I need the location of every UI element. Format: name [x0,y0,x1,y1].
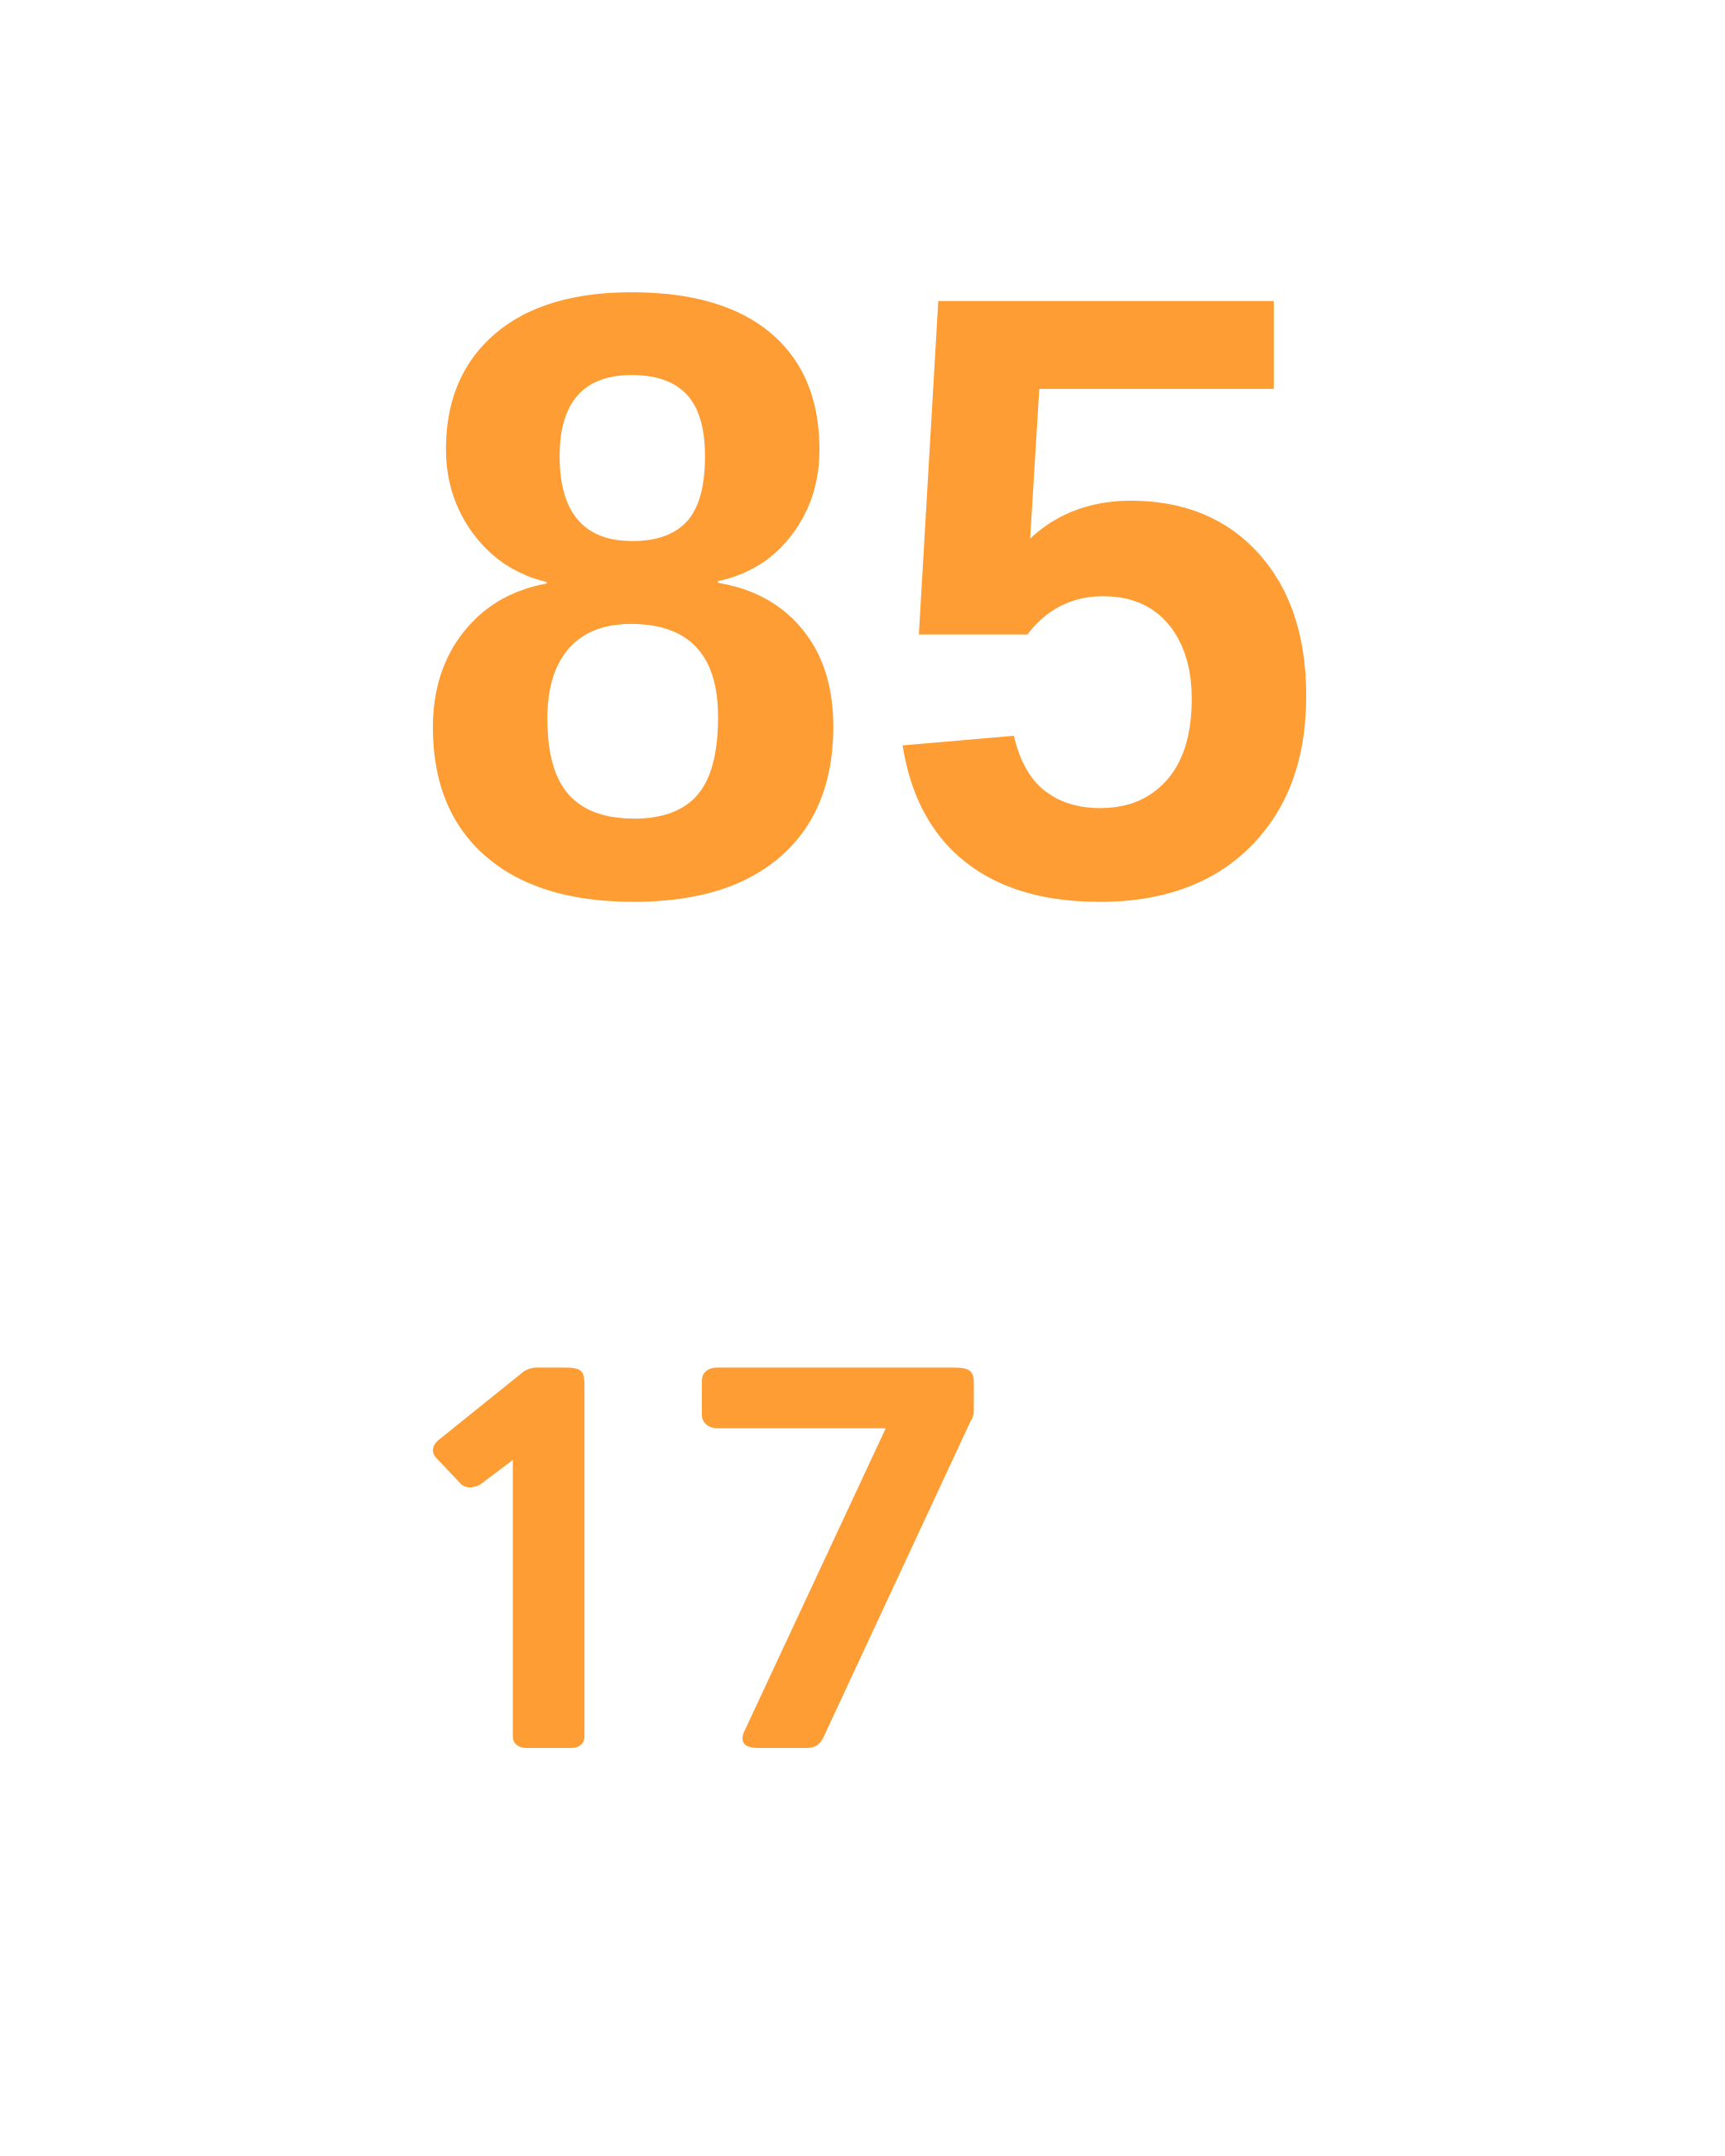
large statistic: 85: 85 [407,115,1329,1077]
secondary statistic: 17: 17 [368,1332,1009,1814]
